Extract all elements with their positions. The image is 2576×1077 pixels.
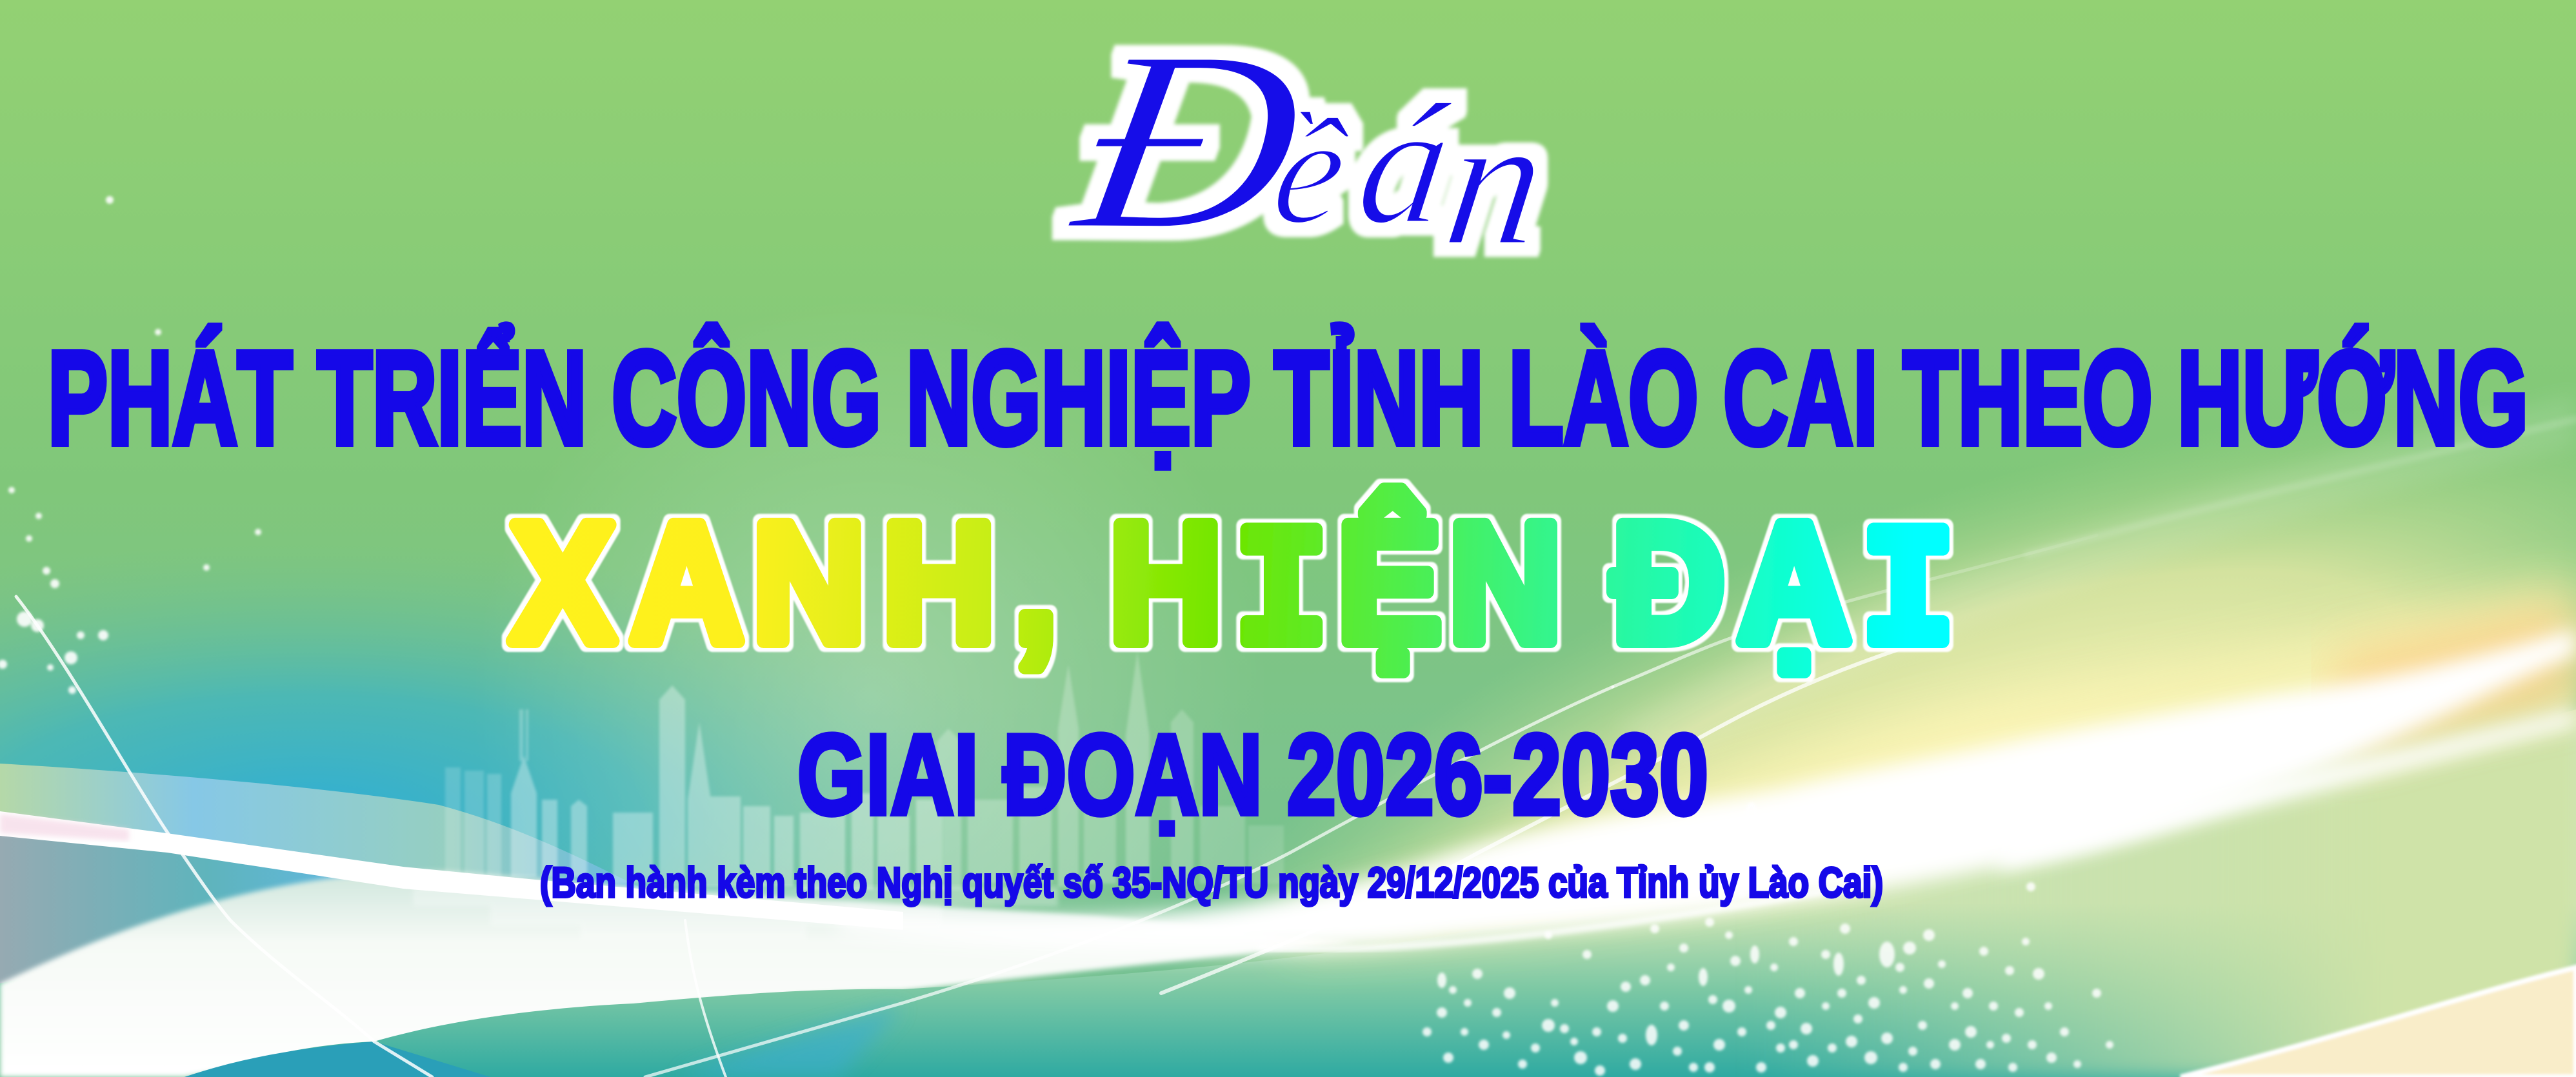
script heading: Đề án [1056, 0, 1557, 285]
sparkles: bottom right [1423, 802, 2113, 1076]
city skyline silhouette [445, 651, 1284, 890]
highlight heading: XANH, HIỆN ĐẠI: XANH, HIỆN ĐẠI [511, 489, 1955, 692]
white light streaks [0, 629, 2576, 953]
subtitle: resolution reference: (Ban hành kèm theo Nghị quyết số 35-NQ/TU ngày 29/12/2025 của Tỉnh ủy Lào Cai) [540, 858, 1883, 906]
bottom-right cream corner [2181, 967, 2576, 1077]
script heading: Đề án: ề [1264, 85, 1357, 257]
script heading: Đề án: á [1348, 67, 1462, 261]
sparkles: upper left [0, 196, 261, 694]
script heading: Đề án: n [1435, 77, 1557, 285]
period heading: GIAI ĐOẠN 2026-2030: GIAI ĐOẠN 2026-2030 [797, 711, 1708, 838]
skyline reflection in the light band [413, 887, 1058, 940]
thin curved light lines [16, 419, 2576, 1077]
script heading: Đề án: Đ [1056, 0, 1321, 283]
